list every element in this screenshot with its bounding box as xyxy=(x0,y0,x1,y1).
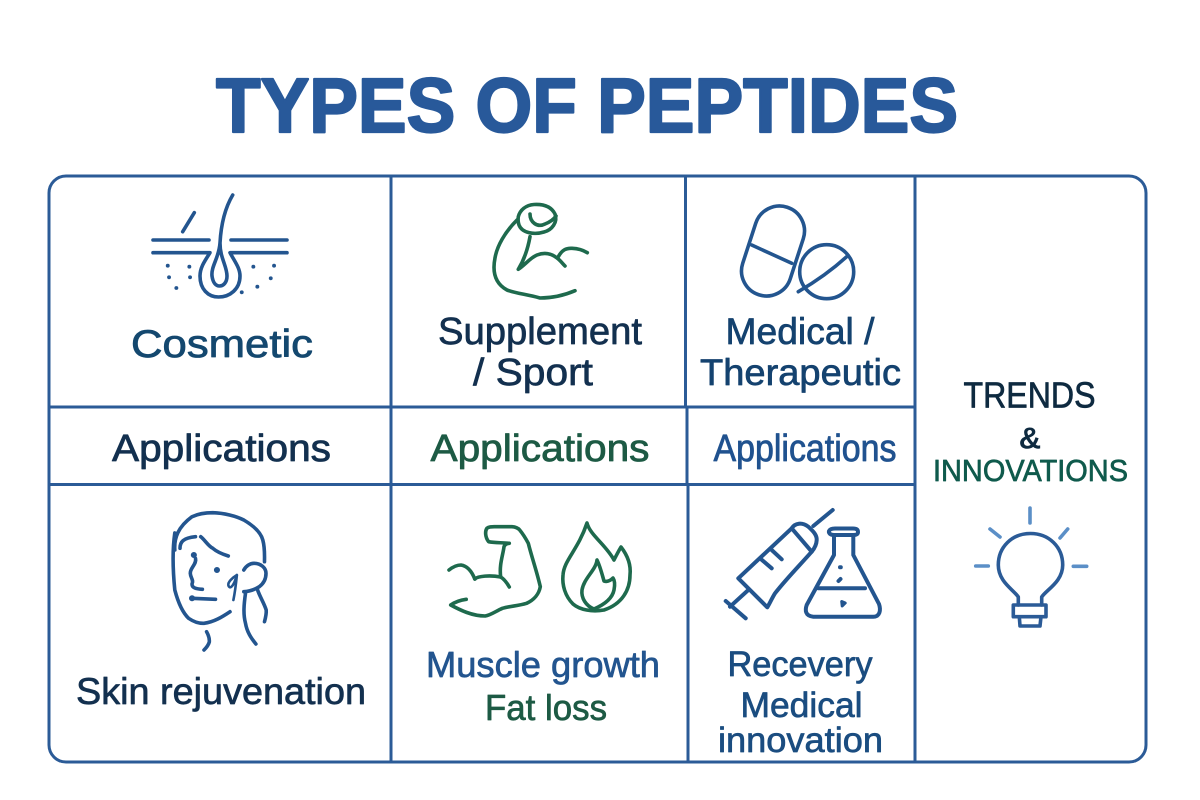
icon: flame xyxy=(563,523,630,611)
icon: syringe xyxy=(726,510,833,618)
panel: medical / therapeutic: Therapeutic xyxy=(700,352,901,393)
label: Medical innovation: Medical xyxy=(740,686,862,725)
icon: flexed arm xyxy=(494,204,587,298)
icon: muscle arm xyxy=(449,527,540,616)
panel: recovery xyxy=(718,510,883,760)
panel: trends and innovations xyxy=(933,374,1128,626)
icon: face profile xyxy=(173,513,266,650)
label: Trends: TRENDS xyxy=(964,374,1096,416)
panel: medical / therapeutic xyxy=(700,200,901,393)
panel: cosmetic xyxy=(131,195,313,366)
heading: applications medical: Applications xyxy=(714,428,896,470)
icon: hair follicle xyxy=(153,195,287,297)
panel: muscle growth xyxy=(426,523,660,728)
label: ampersand: & xyxy=(1019,420,1041,456)
heading: applications sport: Applications xyxy=(430,428,650,470)
label: Innovations: INNOVATIONS xyxy=(933,453,1128,488)
label: Fat loss: Fat loss xyxy=(485,687,607,728)
label: Medical / Therapeutic: Medical / xyxy=(726,311,875,352)
label: Recovery: Recevery xyxy=(728,645,873,684)
table grid xyxy=(49,176,1146,762)
label: Muscle growth: Muscle growth xyxy=(426,644,660,685)
icon: light bulb xyxy=(976,508,1087,626)
title: TYPES OF PEPTIDES xyxy=(216,63,958,149)
icon: pills xyxy=(735,200,854,302)
label: Skin rejuvenation: Skin rejuvenation xyxy=(76,671,366,712)
panel: recovery: innovation xyxy=(718,721,883,760)
panel: skin rejuvenation xyxy=(76,513,366,712)
panel: supplement / sport xyxy=(438,204,642,394)
heading: applications cosmetic: Applications xyxy=(112,428,331,470)
icon: flask xyxy=(806,528,880,617)
label: Supplement / Sport: Supplement xyxy=(438,311,642,353)
label: Cosmetic: Cosmetic xyxy=(131,323,313,366)
panel: supplement / sport: / Sport xyxy=(473,352,593,394)
